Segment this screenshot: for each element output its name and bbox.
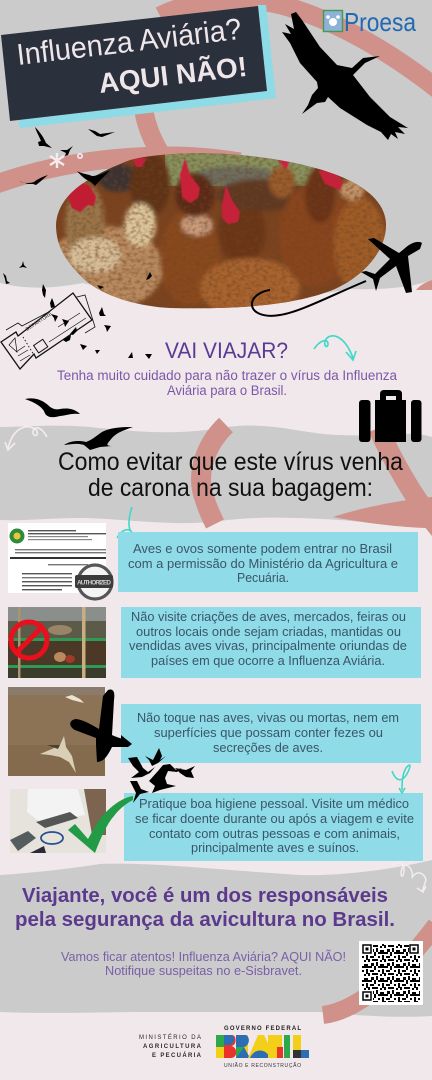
- text: travel warning: Aviária para o Brasil.: [167, 383, 287, 398]
- heading: traveller responsibility: [15, 884, 395, 931]
- icon: teal arrow to first panel: [117, 507, 132, 538]
- heading: how to avoid: de carona na sua bagagem:: [88, 474, 373, 502]
- photo: hens: [56, 153, 386, 308]
- icon: seagull one: [25, 398, 80, 417]
- panel: hygiene text: [124, 793, 423, 861]
- photo: doctor consultation: [10, 789, 106, 853]
- heading: how to avoid: Como evitar que este vírus venha: [58, 448, 403, 476]
- panel: permit text: Pecuária.: [237, 570, 289, 585]
- icon: green check mark: [68, 796, 133, 853]
- icon: seagull two: [64, 427, 133, 450]
- icon: flock of geese: [128, 748, 195, 803]
- title banner: [1, 5, 276, 128]
- logo: ministry: E PECUÁRIA: [152, 1052, 202, 1059]
- icon: authorized stamp: [75, 565, 113, 599]
- panel: do not touch text: [121, 704, 421, 763]
- photo: live bird market with prohibition sign: [8, 607, 106, 678]
- title banner: Influenza Aviária?: [15, 13, 243, 72]
- icon: suitcase: [359, 390, 422, 442]
- heading: traveller responsibility: pela segurança da avicultura no Brasil.: [15, 908, 395, 931]
- logo: ministry: MINISTÉRIO DA: [139, 1034, 201, 1041]
- panel: hygiene text: contato com outras pessoas e com animais,: [149, 826, 400, 841]
- Proesa logo: Proesa: [344, 7, 416, 37]
- icon: small birds near banner: [19, 127, 115, 186]
- icon: white squiggle arrow: [392, 863, 426, 892]
- logo: governo federal brasil: [216, 1026, 309, 1069]
- panel: no market visits text: vendidas aves vivas, principalmente oriundas de: [129, 638, 407, 653]
- panel: hygiene text: se ficar doente durante ou após a viagem e evite: [135, 811, 414, 826]
- panel: permit text: Aves e ovos somente podem entrar no Brasil: [133, 541, 392, 556]
- panel: hygiene text: principalmente aves e suínos.: [191, 840, 359, 855]
- heading: traveller responsibility: Viajante, você é um dos responsáveis: [22, 884, 388, 907]
- text: travel warning: Tenha muito cuidado para não trazer o vírus da Influenza: [57, 368, 398, 383]
- logo: ministry: [139, 1034, 202, 1059]
- panel: permit text: [118, 532, 418, 592]
- panel: hygiene text: Pratique boa higiene pessoal. Visite um médico: [139, 796, 409, 811]
- panel: no market visits text: Não visite criações de aves, mercados, feiras ou: [131, 609, 406, 624]
- panel: do not touch text: Não toque nas aves, vivas ou mortas, nem em: [137, 710, 399, 725]
- panel: permit text: com a permissão do Ministério da Agricultura e: [128, 556, 398, 571]
- decorative white asterisk and dot: [50, 153, 82, 168]
- icon: authorized stamp: AUTHORIZED: [77, 580, 111, 586]
- logo: governo federal brasil: UNIÃO E RECONSTRUÇÃO: [224, 1062, 301, 1069]
- text: travel warning: [57, 368, 398, 398]
- panel: no market visits text: países em que ocorre a Influenza Aviária.: [151, 653, 385, 668]
- logo: governo federal brasil: GOVERNO FEDERAL: [224, 1026, 301, 1032]
- title banner: AQUI NÃO!: [97, 51, 249, 99]
- text: notify suspects: [61, 949, 346, 978]
- icon: white loop arrow: [5, 427, 47, 450]
- icon: airplane with loop trail: [252, 238, 422, 316]
- icon: departure ticket: DEPARTURE: [25, 311, 54, 333]
- heading: how to avoid: [58, 448, 403, 502]
- icon: large flying stork: [282, 12, 408, 140]
- panel: no market visits text: outros locais onde sejam criadas, mantidas ou: [136, 624, 401, 639]
- photo: dead birds on sand: [8, 687, 105, 776]
- panel: do not touch text: secreções de aves.: [213, 740, 323, 755]
- logo: ministry: AGRICULTURA: [143, 1044, 202, 1050]
- text: notify suspects: Notifique suspeitas no e-Sisbravet.: [105, 963, 302, 978]
- icon: teal arrow to last panel: [392, 765, 410, 793]
- text: notify suspects: Vamos ficar atentos! Influenza Aviária? AQUI NÃO!: [61, 949, 346, 964]
- icon: teal loop arrow: [314, 336, 356, 360]
- panel: do not touch text: superfícies que possam conter fezes ou: [154, 725, 383, 740]
- icon: flock of small birds: [3, 261, 152, 359]
- heading: vai viajar: VAI VIAJAR?: [165, 338, 288, 363]
- panel: document permit: [8, 523, 106, 593]
- icon: departure ticket: [1, 293, 95, 369]
- QR code: [359, 941, 423, 1005]
- icon: black airplane cross: [70, 690, 132, 762]
- panel: no market visits text: [121, 607, 421, 678]
